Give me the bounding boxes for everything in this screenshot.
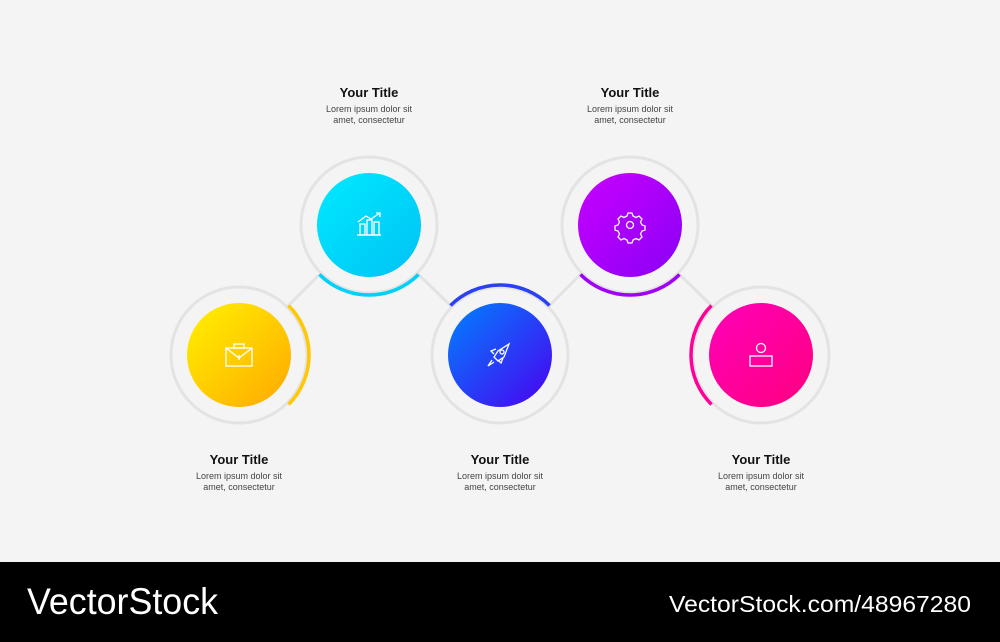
circle 5: user (709, 303, 813, 407)
outer rings (171, 157, 829, 423)
circle 3: rocket (448, 303, 552, 407)
text blocks: Your Title (340, 85, 398, 100)
footer (0, 562, 1000, 642)
circle 4: gear (578, 173, 682, 277)
text blocks: Lorem ipsum dolor sit (718, 471, 805, 481)
text blocks: Lorem ipsum dolor sit (457, 471, 544, 481)
text blocks: Your Title (732, 452, 790, 467)
text blocks: Lorem ipsum dolor sit (196, 471, 283, 481)
circle 2: chart (317, 173, 421, 277)
colored arcs (288, 274, 712, 404)
text blocks: amet, consectetur (464, 482, 536, 492)
text blocks: amet, consectetur (725, 482, 797, 492)
text blocks (196, 85, 805, 492)
text blocks: Your Title (601, 85, 659, 100)
text blocks: amet, consectetur (594, 115, 666, 125)
footer: VectorStock.com/48967280 (669, 591, 971, 617)
footer: VectorStock (27, 581, 218, 622)
text blocks: Your Title (471, 452, 529, 467)
text blocks: amet, consectetur (333, 115, 405, 125)
text blocks: Lorem ipsum dolor sit (587, 104, 674, 114)
text blocks: Your Title (210, 452, 268, 467)
text blocks: Lorem ipsum dolor sit (326, 104, 413, 114)
circle 1: briefcase (187, 303, 291, 407)
connectors (288, 274, 712, 306)
text blocks: amet, consectetur (203, 482, 275, 492)
